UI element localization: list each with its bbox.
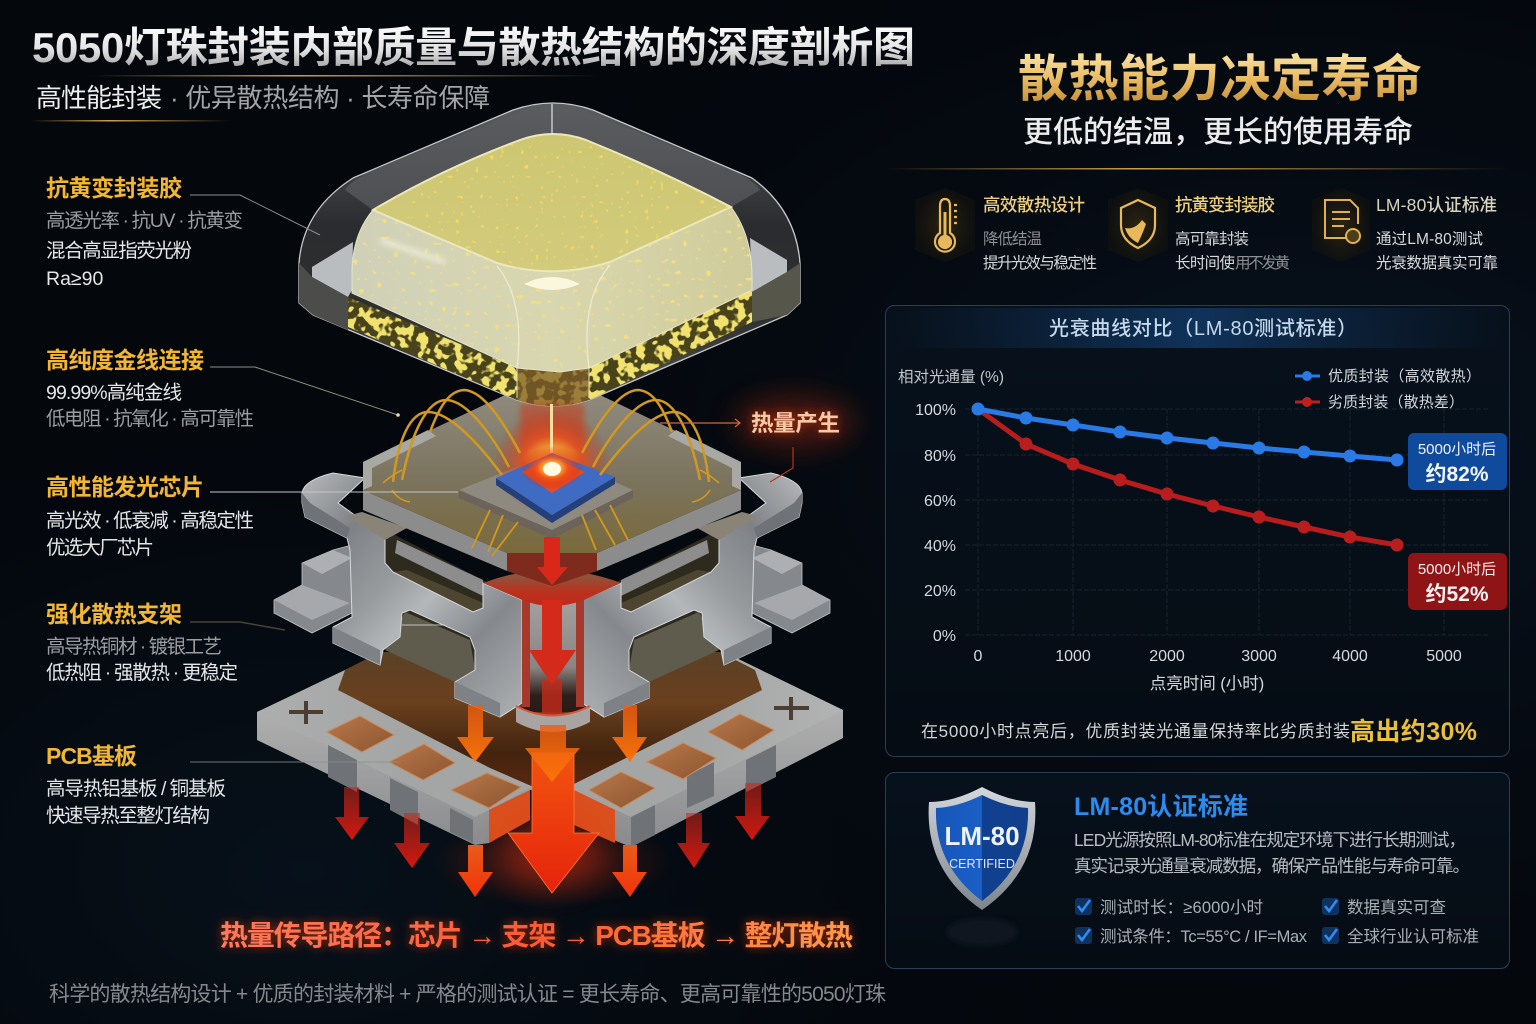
label: encapsulant: Ra≥90 bbox=[46, 268, 103, 290]
callout: good bbox=[1408, 433, 1507, 490]
checklist: 测试时长：≥6000小时 bbox=[1100, 898, 1263, 917]
feature: LM-80: LM-80认证标准 bbox=[1376, 195, 1497, 215]
x axis labels: 0 bbox=[974, 648, 983, 665]
label: encapsulant bbox=[46, 175, 320, 290]
label: PCB: PCB基板 bbox=[46, 743, 137, 769]
red series bbox=[978, 409, 1404, 552]
axis titles: 相对光通量 (%) bbox=[898, 368, 1004, 386]
feature: heat dissipation: 提升光效与稳定性 bbox=[983, 254, 1097, 272]
axis titles bbox=[898, 368, 1264, 693]
feature: LM-80: 通过LM-80测试 bbox=[1376, 230, 1483, 248]
checklist: 测试条件：Tc=55°C / IF=Max bbox=[1100, 927, 1308, 946]
metal bracket bbox=[274, 473, 830, 732]
grid bbox=[965, 409, 1490, 635]
y axis labels: 20% bbox=[924, 583, 956, 600]
heading: LM-80认证标准 bbox=[1074, 793, 1248, 821]
x axis labels: 3000 bbox=[1241, 648, 1277, 665]
yellow top face bbox=[373, 134, 731, 271]
PCB substrate bbox=[257, 652, 843, 847]
subtitle: · 优异散热结构 · 长寿命保障 bbox=[170, 83, 490, 113]
x axis labels: 5000 bbox=[1426, 648, 1462, 665]
callout: poor: 5000小时后 bbox=[1418, 561, 1496, 578]
label: chip: 优选大厂芯片 bbox=[46, 537, 154, 559]
label: encapsulant: 抗黄变封装胶 bbox=[46, 175, 182, 201]
feature: heat dissipation: 降低结温 bbox=[983, 230, 1042, 248]
chart header: 光衰曲线对比（LM-80测试标准） bbox=[1049, 317, 1357, 340]
notches on PCB edge bbox=[328, 745, 776, 847]
feature: anti-yellowing: 抗黄变封装胶 bbox=[1175, 195, 1275, 215]
chip board bbox=[363, 395, 741, 586]
outer clear dome bbox=[299, 103, 800, 406]
feature: LM-80: 光衰数据真实可靠 bbox=[1376, 254, 1498, 272]
gray base plate bbox=[312, 242, 353, 297]
label: PCB: 快速导热至整灯结构 bbox=[46, 805, 210, 827]
copper pads bbox=[327, 714, 774, 808]
chart conclusion: 高出约30% bbox=[1350, 718, 1477, 746]
chip substrate bbox=[459, 453, 633, 530]
label: gold wire: 99.99%高纯金线 bbox=[46, 382, 182, 404]
foot faces bbox=[333, 627, 380, 665]
icon: document bbox=[1325, 200, 1360, 243]
footer tagline: 科学的散热结构设计 + 优质的封装材料 + 严格的测试认证 = 更长寿命、更高可靠性的5050灯珠 bbox=[49, 983, 886, 1006]
icon: LM-80 shield bbox=[929, 787, 1035, 910]
ledge behind the ring bbox=[346, 512, 407, 540]
LED chip bbox=[496, 446, 615, 523]
icon: thermometer bbox=[935, 199, 957, 252]
back feet bbox=[274, 545, 830, 633]
reflection bbox=[946, 918, 1018, 946]
feature: LM-80 bbox=[1312, 188, 1498, 272]
description: 真实记录光通量衰减数据，确保产品性能与寿命可靠。 bbox=[1074, 856, 1470, 876]
feature: anti-yellowing: 用不发黄 bbox=[1235, 254, 1290, 272]
lower clear band bbox=[299, 263, 348, 330]
title: 5050灯珠封装内部质量与散热结构的深度剖析图 bbox=[32, 24, 915, 71]
y axis labels: 80% bbox=[924, 448, 956, 465]
yellow lower band bbox=[348, 290, 752, 406]
callout: good: 5000小时后 bbox=[1418, 441, 1496, 458]
checklist: 数据真实可查 bbox=[1347, 898, 1446, 917]
feature: heat dissipation: 高效散热设计 bbox=[983, 195, 1085, 215]
panel: decay chart bbox=[886, 306, 1510, 756]
bracket interior seen through windows bbox=[385, 530, 719, 690]
label: PCB: 高导热铝基板 / 铜基板 bbox=[46, 778, 226, 800]
chart conclusion: 在5000小时点亮后，优质封装光通量保持率比劣质封装 bbox=[921, 722, 1350, 741]
central column bbox=[522, 600, 584, 712]
yellow body bbox=[352, 207, 752, 372]
heat path caption: 热量传导路径：芯片 → 支架 → PCB基板 → 整灯散热 bbox=[220, 920, 853, 951]
feature: heat dissipation bbox=[915, 188, 1097, 272]
callout: poor: 约52% bbox=[1425, 583, 1489, 606]
label: bracket: 低热阻 · 强散热 · 更稳定 bbox=[46, 662, 238, 684]
gold bonding wires bbox=[383, 390, 719, 556]
label: encapsulant: 高透光率 · 抗UV · 抗黄变 bbox=[46, 210, 243, 232]
exploded LED illustration bbox=[257, 103, 843, 907]
legend: 优质封装（高效散热） bbox=[1328, 368, 1481, 385]
blue series bbox=[972, 402, 1404, 466]
panel: LM-80 certification bbox=[886, 772, 1510, 968]
heat glow under base bbox=[432, 817, 672, 907]
label: gold wire bbox=[46, 347, 400, 430]
label: encapsulant: 混合高显指荧光粉 bbox=[46, 240, 192, 262]
main walls bbox=[302, 473, 522, 717]
right heading: 更低的结温，更长的使用寿命 bbox=[1023, 116, 1413, 149]
y axis labels: 0% bbox=[933, 628, 956, 645]
checklist bbox=[1075, 898, 1479, 946]
description bbox=[1074, 830, 1470, 876]
right heading: 散热能力决定寿命 bbox=[1018, 51, 1422, 107]
x axis labels bbox=[974, 648, 1462, 665]
encapsulant dome bbox=[299, 103, 800, 415]
icon: shield bbox=[1121, 200, 1155, 248]
label: chip: 高光效 · 低衰减 · 高稳定性 bbox=[46, 510, 254, 532]
upper heat arrows bbox=[457, 537, 647, 893]
feature: anti-yellowing: 高可靠封装 bbox=[1175, 230, 1249, 248]
legend bbox=[1295, 368, 1481, 411]
right heading bbox=[885, 51, 1510, 170]
feature: anti-yellowing bbox=[1108, 188, 1290, 272]
description: LED光源按照LM-80标准在规定环境下进行长期测试， bbox=[1074, 830, 1466, 850]
label: bracket: 高导热铜材 · 镀银工艺 bbox=[46, 636, 222, 658]
y axis labels: 100% bbox=[915, 402, 956, 419]
label: heat generated: 热量产生 bbox=[751, 411, 840, 436]
x axis labels: 1000 bbox=[1055, 648, 1091, 665]
legend: 劣质封装（散热差） bbox=[1328, 394, 1464, 411]
label: bracket: 强化散热支架 bbox=[46, 601, 182, 627]
heat column and chip glow bbox=[494, 404, 610, 514]
icon: LM-80 shield: CERTIFIED bbox=[949, 857, 1015, 871]
callout: good: 约82% bbox=[1425, 463, 1489, 486]
x axis labels: 4000 bbox=[1332, 648, 1368, 665]
subtitle bbox=[30, 83, 490, 122]
label: chip: 高性能发光芯片 bbox=[46, 474, 204, 500]
subtitle: 高性能封装 bbox=[36, 83, 162, 113]
chart conclusion bbox=[921, 718, 1477, 746]
lower heat arrows bbox=[335, 783, 770, 897]
label: gold wire: 高纯度金线连接 bbox=[46, 347, 204, 373]
checklist: 全球行业认可标准 bbox=[1347, 927, 1479, 946]
y axis labels: 40% bbox=[924, 538, 956, 555]
callout: poor bbox=[1408, 553, 1507, 610]
label: PCB bbox=[46, 743, 400, 827]
icon: LM-80 shield: LM-80 bbox=[944, 821, 1020, 851]
chart header bbox=[890, 308, 1505, 348]
polarity marks bbox=[289, 701, 323, 724]
feature: anti-yellowing: 长时间使 bbox=[1175, 254, 1235, 272]
x axis labels: 2000 bbox=[1149, 648, 1185, 665]
label: gold wire: 低电阻 · 抗氧化 · 高可靠性 bbox=[46, 408, 254, 430]
y axis labels: 60% bbox=[924, 493, 956, 510]
label: chip bbox=[46, 474, 458, 559]
label: heat generated bbox=[660, 396, 855, 482]
y axis labels bbox=[915, 402, 956, 645]
axis titles: 点亮时间 (小时) bbox=[1150, 674, 1264, 693]
label: bracket bbox=[46, 601, 445, 684]
